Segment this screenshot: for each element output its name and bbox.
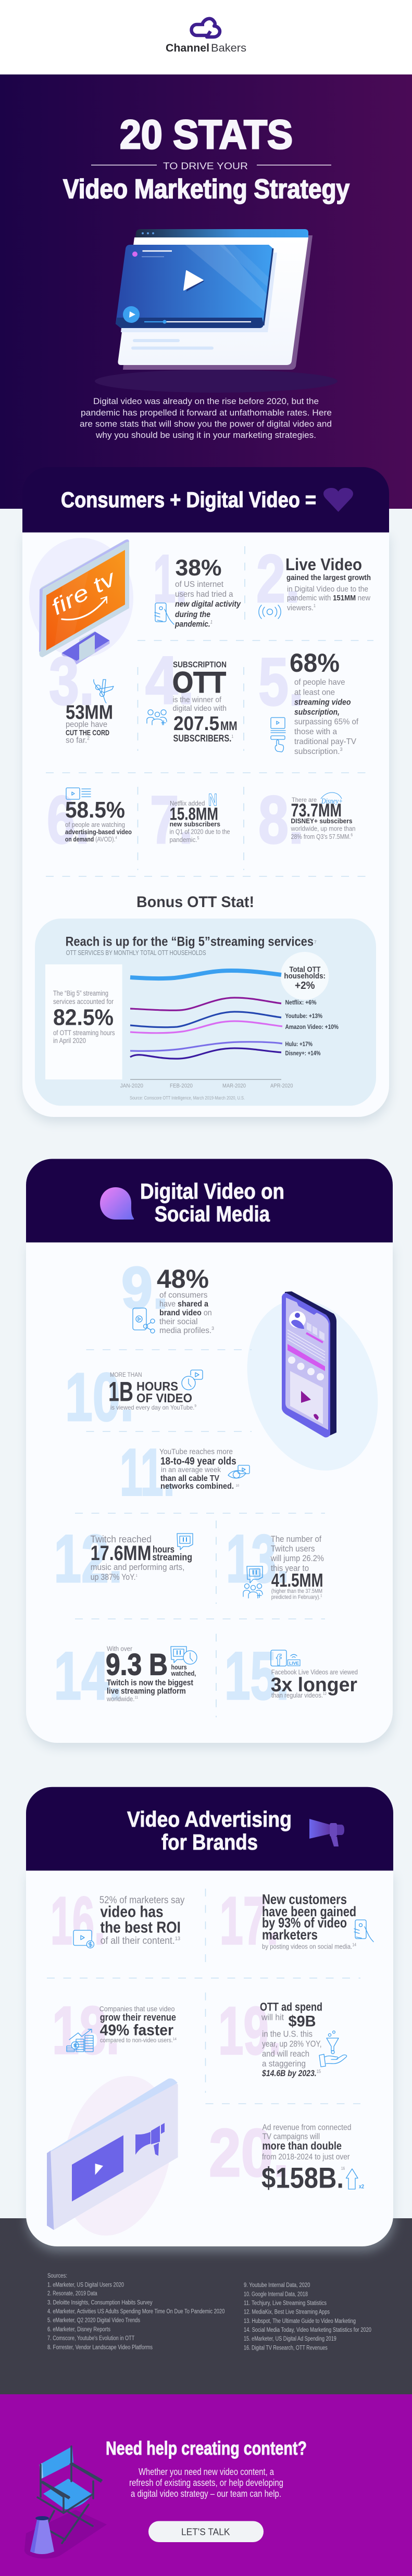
stat 8: There are [292,796,317,803]
sources list: 6. eMarketer, Disney Reports [47,2327,110,2333]
stat 10: 1B [108,1377,133,1408]
stat 11: 18-to-49 year olds [160,1456,236,1467]
sources list: 14. Social Media Today, Video Marketing Statistics for 2020 [244,2327,371,2333]
panel: OTT streaming chart [35,919,376,1106]
stat 8 [258,782,355,858]
heading: Social Media [155,1202,270,1226]
stat 13: will jump 26.2% [270,1553,324,1563]
icon: video with dollar [73,1930,94,1948]
icon: group of people [147,710,167,725]
sources list: 11. Techjury, Live Streaming Statistics [244,2301,327,2307]
text block: Whether you need new video content, a [139,2467,274,2477]
stat 12: 1 [136,1574,138,1578]
stat 10: is viewed every day on YouTube. [110,1404,202,1411]
stat 8: 8. [258,782,304,858]
stat 5: of people have [294,678,345,687]
text block: a digital video strategy – our team can help. [131,2489,281,2499]
heading: Consumers + Digital Video = [61,487,316,512]
icon: eye and video [228,1465,249,1478]
icon: Disney+ logo [321,793,343,806]
icon: broadcast signal [259,605,281,619]
stat 12: up 387% YoY. [91,1572,145,1582]
stat 7: Netflix added [170,799,205,807]
stat 11: networks combined. [160,1482,234,1491]
stat 19: 15 [317,2069,321,2074]
hero background [0,74,412,509]
stat 14: worldwide. [107,1695,138,1703]
stat 19: will hit [261,2012,284,2022]
sources list: 1. eMarketer, US Digital Users 2020 [47,2282,124,2289]
stat 14: 11 [134,1696,138,1700]
stat 17 [220,1882,373,1958]
intro paragraph: are some stats that will show you the power of digital video and [80,419,332,429]
stat 15: 3x longer [271,1674,357,1696]
stat 8: 73.7MM [291,800,342,821]
stat 1: 1. [153,541,187,617]
sources list: 9. Youtube Internal Data, 2020 [244,2282,310,2289]
chart heading: Reach is up for the “Big 5”streaming services [66,935,314,949]
stat 6: 4 [115,836,117,840]
stat 1 [153,541,241,629]
logo wordmark: Bakers [211,42,246,54]
stat 17: 14 [352,1943,356,1947]
stat 17: New customers [262,1892,347,1907]
call to action [24,2437,307,2558]
stat 9: 9. [121,1255,168,1321]
stat 20: $158B. [261,2162,344,2194]
icon: Facebook Live: LIVE [289,1661,299,1666]
stat 10: 10. [65,1359,134,1435]
stat 9: their social [159,1317,198,1326]
stat 14: hours [171,1663,187,1671]
stat 17: by 93% of video [262,1915,347,1931]
panel: Consumers + Digital Video [22,467,389,1117]
stat 17: by posting videos on social media. [262,1943,365,1951]
sources list [47,2273,371,2352]
stat 5: streaming video [294,698,351,707]
stat 19: year, up 28% YOY, [262,2039,322,2049]
stat 3: people have [66,720,107,729]
stat 18: grow their revenue [100,2012,176,2023]
icon: megaphone [309,1819,344,1846]
stat 15: than regular videos. [271,1692,329,1699]
illustration: director chair and megaphone [24,2446,107,2558]
stat 7: 15.8MM [170,804,218,824]
line chart: JAN-2020 [120,1083,143,1089]
chart source: Source: Comscore OTT Intelligence, March 2019-March 2020, U.S. [130,1096,245,1101]
stat 2: pandemic with 151MM new [287,594,370,602]
title: Video Marketing Strategy [63,174,349,204]
icon: up arrow x2: x2 [359,2184,364,2190]
stat 4: 1 [231,734,233,739]
stat 18: 18. [52,1992,120,2068]
heading [127,1807,292,1854]
icon: Twitch with clock [171,1647,197,1664]
line chart: MAR-2020 [222,1083,246,1089]
stat 1: during the [175,610,210,619]
stat 17: marketers [262,1927,318,1942]
stat 9: 48% [157,1264,209,1293]
stat 1: 38% [175,555,222,581]
sources list: 16. Digital TV Research, OTT Revenues [244,2345,328,2352]
intro paragraph [80,396,332,440]
icon: Twitch community [243,1566,263,1598]
sources list: 3. Deloitte Insights, Consumption Habits Survey [47,2299,153,2306]
stat 1: new digital activity [175,600,241,609]
heading: Digital Video on [140,1179,284,1203]
stat 7: in Q1 of 2020 due to the [170,828,230,835]
sources list: 10. Google Internal Data, 2018 [244,2291,308,2297]
stat 6: 6. [47,782,90,858]
icon: up arrow x2 [346,2169,364,2190]
stat 1: 1 [210,620,213,625]
stat 11: YouTube reaches more [159,1447,233,1456]
stat 2: 1 [314,604,316,608]
stat 2 [256,541,371,619]
stat 4: OTT [172,666,226,699]
stat 16: the best ROI [100,1918,181,1937]
stat 8: 6 [351,833,353,837]
stat 16: video has [100,1903,164,1921]
call to action background [0,2394,412,2576]
stat 6: advertising-based video [65,828,132,836]
fire tv wordmark: fire tv [47,565,121,620]
page background [0,509,412,2218]
stat 12: 12. [54,1521,122,1597]
button: LET'S TALK [181,2527,230,2537]
stat 3: CUT THE CORD [66,728,109,737]
stat 14: Twitch is now the biggest [107,1679,194,1688]
sources list: 4. eMarketer, Activities US Adults Spending More Time On Due To Pandemic 2020 [47,2308,224,2315]
stat 2: Live Video [285,555,362,574]
stat 4: is the winner of [173,696,222,704]
stat 9: of consumers [159,1291,207,1300]
stat 14: 14. [54,1638,122,1714]
stat 19 [218,1993,347,2078]
panel: OTT streaming chart: 7 [314,940,317,945]
stat 14 [54,1638,197,1714]
icon: video subscribe click [271,718,285,752]
stat 20: TV campaigns will [263,2132,320,2141]
callout: total households [280,952,329,1000]
stat 14: With over [107,1644,133,1653]
stat 5: at least one [294,688,335,697]
stat 8: worldwide, up more than [291,824,355,832]
stat 11: in an average week [161,1465,221,1474]
callout: Big 5 share: of OTT streaming hours [53,1029,115,1037]
icon: hand holding phone [155,603,174,624]
stat 4: MM [220,719,238,733]
stat 5: traditional pay-TV [294,737,356,746]
stat 9: 3 [211,1326,214,1331]
icon: coins and growth [67,2029,93,2052]
stat 10 [65,1359,203,1435]
stat 2: gained the largest growth [286,573,371,582]
stat 16: 13 [175,1936,180,1942]
stat 12 [54,1521,193,1597]
stat 19: in the U.S. this [262,2029,313,2039]
stat 4: SUBSCRIBERS. [173,733,244,744]
stat 18: compared to non-video users. [100,2038,179,2044]
stat 17: 17. [220,1882,278,1958]
stat 9 [121,1255,214,1335]
stat 20: from 2018-2024 to just over [262,2153,350,2162]
stat 2: 2. [256,541,300,617]
stat 10: 9 [194,1404,196,1408]
line chart: APR-2020 [270,1083,293,1089]
icon: Channel Bakers cloud logo [192,19,220,37]
text block [129,2467,283,2499]
sources list: 7. Comscore, Youtube's Evolution in OTT [47,2335,134,2342]
stat 1: users had tried a [175,590,233,599]
button [148,2521,264,2542]
stat 3: 53MM [66,702,113,724]
icon: Disney+ logo: Disney+ [321,797,343,806]
stat 3: 3. [49,643,94,719]
stat 19: a staggering [262,2059,306,2069]
stat 15: 12 [323,1692,327,1696]
intro paragraph: why you should be using it in your marketing strategies. [95,430,316,440]
stat 13: this year to [271,1563,309,1573]
line chart: Youtube: +13% [285,1012,322,1020]
sources list: 12. MediaKix, Best Live Streaming Apps [244,2309,330,2316]
stat 3: so far. [66,736,89,745]
icon: Twitch [177,1534,193,1550]
logo wordmark: Channel [166,42,209,54]
line chart: FEB-2020 [170,1083,193,1089]
stat 8: DISNEY+ subscibers [291,817,352,825]
stat 5: 3 [340,747,343,752]
heading: Need help creating content? [106,2437,307,2459]
stat 13: 1 [320,1594,322,1598]
stat 7: 7. [150,782,193,858]
stat 11 [120,1435,249,1510]
sources list: Sources: [47,2273,67,2279]
icon: scissors cutting cord [94,680,114,703]
stat 16: 52% of marketers say [99,1895,185,1906]
stat 19: OTT ad spend [260,2001,322,2014]
sources list: 13. Hubspot, The Ultimate Guide to Video Marketing [244,2318,356,2324]
footer sources background [0,2218,412,2394]
stat 7: pandemic. [170,836,201,844]
stat 3 [49,643,114,745]
stat 9: brand video on [159,1309,212,1317]
stat 10: OF VIDEO [136,1391,192,1405]
stat 6: of people are watching [65,821,125,828]
stat 5: subscription, [294,708,340,717]
line chart: Hulu: +17% [285,1040,313,1048]
icon: Facebook Live: f [276,1652,282,1669]
stat 15: Facebook Live Videos are viewed [271,1669,358,1676]
stat 1: of US internet [175,580,224,589]
icon: phone share [133,1308,155,1333]
stat 14: 9.3 B [106,1648,168,1682]
stat 12: hours [153,1544,174,1555]
line chart [120,971,339,1089]
stat 20: 16 [341,2166,345,2171]
stat 6 [47,782,132,858]
stat 10: HOURS [136,1380,178,1393]
sources list: 8. Forrester, Vendor Landscape Video Platforms [47,2344,153,2351]
stat 12: Twitch reached [91,1534,152,1544]
stat 5: those with a [294,727,337,736]
heading: Bonus OTT Stat: Bonus OTT Stat! [136,894,254,911]
sources list: 2. Resonate, 2019 Data [47,2291,97,2297]
stat 19: $14.6B by 2023. [262,2068,328,2078]
callout: Big 5 share: services accounted for [53,998,114,1006]
stat 1: pandemic. [175,620,216,629]
stat 18: Companies that use video [99,2005,175,2013]
stat 13: predicted in February). [271,1594,329,1601]
stat 16: 16. [51,1882,105,1958]
line chart: Amazon Video: +10% [285,1023,339,1031]
stat 4 [145,642,238,744]
stat 7: 5 [197,836,199,840]
stat 11: 10 [235,1485,240,1488]
callout: Big 5 share [45,964,122,1079]
callout: total households: +2% [295,980,315,991]
stat 15: 15. [224,1638,289,1714]
stat 4: 207.5 [173,713,219,735]
panel: Digital Video on Social Media [26,1159,399,1743]
stat 18: 14 [173,2038,177,2041]
stat 4: 4. [145,642,194,718]
stat 13: (higher than the 37.5MM [271,1588,322,1594]
stat 13: The number of [271,1534,321,1544]
chart subtitle: OTT SERVICES BY MONTHLY TOTAL OTT HOUSEHOLDS [66,949,206,957]
stat 2: viewers. [287,604,316,612]
heading: Video Advertising [127,1807,292,1831]
stat 5: subscription. [294,747,341,756]
stat 19: 19. [218,1993,281,2069]
stat 12: streaming [152,1552,192,1563]
intro paragraph: Digital video was already on the rise before 2020, but the [93,396,319,406]
sources list: 5. eMarketer, Q2 2020 Digital Video Trends [47,2318,140,2324]
stat 10: MORE THAN [110,1371,142,1378]
icon: speech bubble [100,1187,134,1220]
stat 13: Twitch users [271,1543,315,1554]
stat 11: than all cable TV [160,1474,219,1483]
illustration: Fire TV monitor [29,538,133,664]
stat 13: 13. [226,1521,289,1597]
text block: refresh of existing assets, or help developing [129,2478,283,2488]
stat 12: 17.6MM [91,1542,151,1565]
stat 2: in Digital Video due to the [287,585,368,594]
icon: clock and video [182,1370,203,1390]
callout: Big 5 share: The “Big 5” streaming [53,989,108,997]
heading [140,1179,284,1226]
stat 5: surpassing 65% of [294,718,359,726]
stat 8: 28% from Q3's 57.5MM. [291,833,364,840]
stat 9: have shared a [159,1300,208,1309]
stat 20 [209,2115,364,2194]
panel: Video Advertising for Brands [26,1787,393,2247]
illustration: video player window [95,229,338,393]
stat 16: of all their content. [101,1936,181,1946]
stat 6: 58.5% [65,797,125,823]
stat 18: 49% faster [100,2021,173,2039]
heading: for Brands [161,1830,258,1854]
stat 3: 2 [87,735,90,740]
title: 20 STATS [120,111,293,157]
stat 5: 68% [290,648,340,677]
callout: Big 5 share: in April 2020 [53,1037,86,1045]
stat 14: live streaming platform [107,1687,186,1696]
stat 5 [258,644,359,756]
title: TO DRIVE YOUR [163,161,248,171]
stat 6: on demand (AVOD). [65,835,120,843]
stat 19: and will reach [262,2049,309,2059]
icon: Facebook Live [271,1650,300,1669]
icon: hand holding phone [354,1920,373,1942]
sources list: 15. eMarketer, US Digital Ad Spending 2019 [244,2336,336,2342]
logo wordmark [166,42,246,54]
stat 7: new subscribers [170,820,220,828]
callout: Big 5 share: 82.5% [53,1004,114,1030]
stat 14: watched, [171,1669,196,1677]
stat 12: music and performing arts, [91,1562,184,1572]
callout: total households: households: [284,972,326,981]
stat 20: more than double [263,2140,342,2152]
illustration: ad board with video and megaphone [47,2064,188,2247]
icon: heart [323,488,353,512]
stat 5: 5. [258,644,304,720]
stat 11: 11. [120,1435,175,1510]
callout: total households: Total OTT [290,965,321,974]
icon: video with text list [66,788,91,799]
line chart: Disney+: +14% [285,1050,321,1057]
stat 13: 41.5MM [271,1569,323,1591]
icon: funnel and hand [319,2031,347,2067]
stat 4: SUBSCRIPTION [173,661,227,670]
stat 20: 20. [209,2115,289,2191]
stat 17: have been gained [262,1904,356,1919]
icon: Netflix N: N [208,790,217,809]
stat 20: Ad revenue from connected [263,2123,351,2132]
illustration: phone with social profile [226,1283,399,1488]
stat 4: digital video with [173,704,227,713]
header: logo [0,0,412,74]
title [63,111,349,204]
line chart: Netflix: +6% [285,999,317,1006]
stat 9: media profiles. [159,1326,214,1335]
intro paragraph: pandemic has propelled it forward at unfathomable rates. Here [81,408,332,418]
stat 19: $9B [289,2013,316,2030]
